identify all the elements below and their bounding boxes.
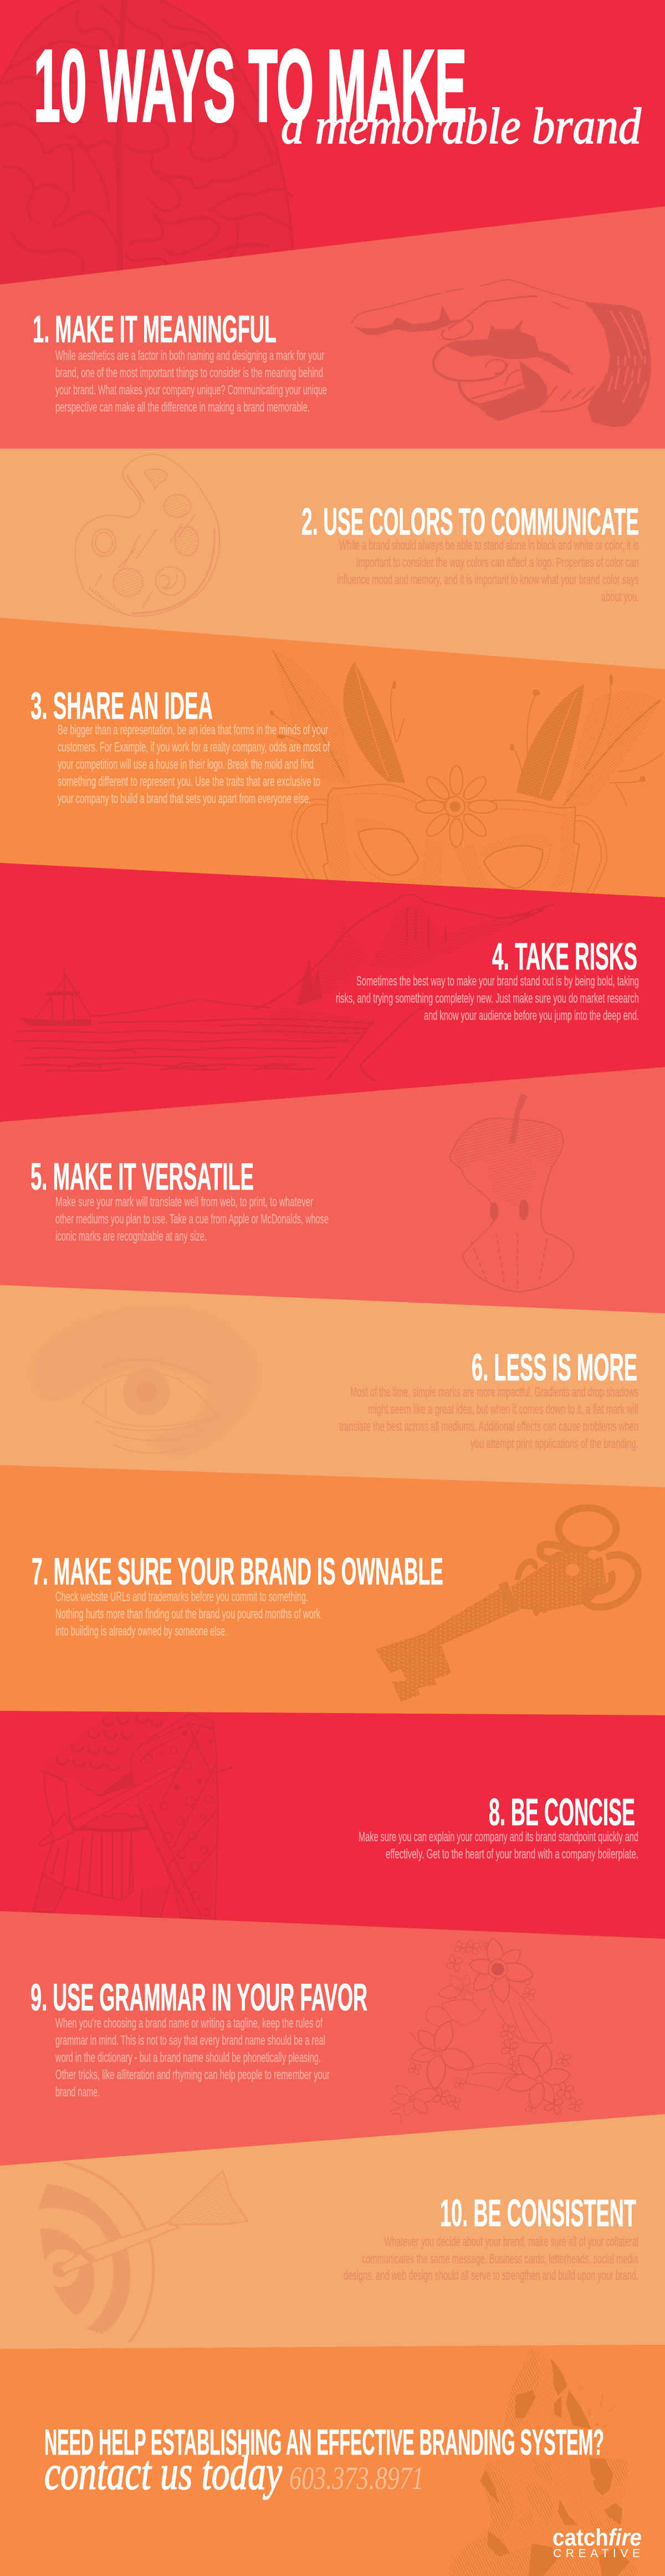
- text block: body copy 3: something different to represent you. Use the traits that are exclusive to: [58, 774, 320, 789]
- panel: 6 less is more: [0, 1285, 665, 1487]
- panel: 2 use colors to communicate: [0, 449, 665, 669]
- text block: body copy 3: your competition will use a house in their logo. Break the mold and find: [58, 757, 314, 772]
- icon: pointing hand: [352, 280, 651, 427]
- icon: floral letter A: [389, 1937, 582, 2122]
- text block: body copy 7: into building is already owned by someone else.: [55, 1624, 227, 1639]
- text block: body copy 2: about you.: [601, 590, 639, 604]
- text block: body copy 9: [55, 2016, 330, 2100]
- panel: 1 make it meaningful: [0, 206, 665, 449]
- panel: 7 make sure your brand is ownable: [0, 1465, 665, 1715]
- icon: target and dart: [38, 2163, 248, 2342]
- text block: body copy 1: While aesthetics are a factor in both naming and designing a mark for your: [55, 348, 324, 363]
- text block: body copy 7: Nothing hurts more than finding out the brand you poured months of work: [55, 1607, 321, 1622]
- text block: body copy 7: [55, 1589, 321, 1639]
- text block: body copy 9: word in the dictionary - but a brand name should be phonetically pleasing.: [55, 2050, 321, 2065]
- text block: body copy 3: [58, 723, 330, 806]
- icon: painter palette: [75, 454, 219, 616]
- text block: body copy 3: Be bigger than a representation, be an idea that forms in the minds of your: [58, 723, 328, 738]
- heading: 3. share an idea: 3. SHARE AN IDEA: [30, 684, 213, 727]
- icon: ornate key: [375, 1508, 638, 1701]
- panel: header: [0, 0, 642, 284]
- text block: body copy 5: other mediums you plan to use. Take a cue from Apple or McDonalds, whose: [55, 1212, 329, 1227]
- text block: body copy 6: [339, 1385, 638, 1451]
- logo: catchfire creative: catchfire: [553, 2524, 642, 2551]
- panel: call to action footer: [0, 2345, 665, 2576]
- text block: body copy 5: Make sure your mark will translate well from web, to print, to whatever: [55, 1195, 313, 1210]
- icon: armored warrior with shield: [33, 1712, 233, 1920]
- icon: feathered masquerade mask: [270, 650, 664, 894]
- text block: body copy 9: brand name.: [55, 2085, 100, 2100]
- text block: body copy 10: [344, 2234, 638, 2283]
- heading: 1. make it meaningful: 1. MAKE IT MEANINGFUL: [33, 308, 277, 350]
- text block: body copy 1: [55, 348, 327, 415]
- panel: 4 take risks: [1, 863, 664, 1082]
- icon: engraved brain: [0, 0, 298, 306]
- text block: body copy 4: [336, 974, 639, 1023]
- panel: 9 use grammar in your favor: [0, 1911, 665, 2166]
- text block: body copy 2: [337, 538, 639, 604]
- text block: body copy 7: Check website URLs and trademarks before you commit to something.: [55, 1589, 308, 1604]
- text: phone number: 603.373.8971: [289, 2460, 424, 2496]
- text: contact us today: contact us today: [44, 2446, 283, 2500]
- icon: island and sailing ship: [13, 895, 554, 1081]
- text block: body copy 1: your brand. What makes your company unique? Communicating your unique: [55, 383, 327, 398]
- panel: 10 be consistent: [0, 2114, 665, 2349]
- icon: apple core: [449, 1093, 574, 1292]
- icon: flames: [449, 2348, 639, 2576]
- text block: body copy 8: [359, 1830, 638, 1862]
- logo: catchfire creative: CREATIVE: [553, 2547, 640, 2560]
- panel: 8 be concise: [0, 1711, 665, 1939]
- text block: body copy 3: customers. For Example, if you work for a realty company, odds are most of: [58, 740, 330, 755]
- icon: engraved eye: [40, 1311, 252, 1454]
- panel: 5 make it versatile: [0, 1067, 665, 1313]
- text block: body copy 5: iconic marks are recognizable at any size.: [55, 1229, 207, 1244]
- text block: body copy 9: When you’re choosing a brand name or writing a tagline, keep the rules of: [55, 2016, 323, 2031]
- text block: body copy 5: [55, 1195, 329, 1244]
- panel: 3 share an idea: [0, 618, 665, 897]
- text block: body copy 3: your company to build a brand that sets you apart from everyone else.: [58, 791, 311, 806]
- heading: 9. use grammar in your favor: 9. USE GRAMMAR IN YOUR FAVOR: [30, 1976, 367, 2019]
- heading: 5. make it versatile: 5. MAKE IT VERSATILE: [30, 1155, 254, 1198]
- text block: body copy 1: perspective can make all the difference in making a brand memorable.: [55, 400, 310, 415]
- text block: body copy 1: brand, one of the most important things to consider is the meaning behind: [55, 365, 323, 380]
- text block: body copy 9: Other tricks, like alliteration and rhyming can help people to remember your: [55, 2067, 330, 2082]
- text block: body copy 9: grammar in mind. This is not to say that every brand name should be a real: [55, 2033, 325, 2048]
